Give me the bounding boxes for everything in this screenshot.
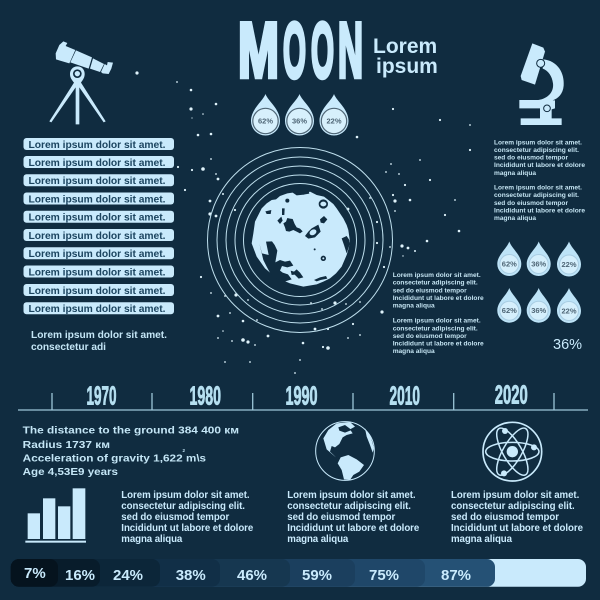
moon facts: Radius 1737 км (23, 440, 110, 451)
text block: below list: Lorem ipsum dolor sit amet. (31, 330, 167, 341)
text block: upper right: Incididunt ut labore et dolore (494, 162, 585, 169)
text block: right of moon: consectetur adipiscing elit. (393, 280, 478, 287)
title: O (311, 6, 334, 94)
text column 3: Incididunt ut labore et dolore (451, 523, 584, 534)
orbit rings (208, 148, 392, 332)
text block: right of moon: magna aliqua (393, 302, 435, 310)
moon facts (23, 425, 239, 478)
moon (252, 190, 350, 287)
text block: right of moon: Incididunt ut labore et dolore (393, 340, 484, 348)
timeline: 1970 (86, 380, 116, 410)
text column 2: magna aliqua (287, 534, 349, 545)
right percentage drops grid: 36% (531, 260, 547, 268)
list of highlighted bars: Lorem ipsum dolor sit amet. (28, 194, 166, 205)
text column 1: sed do eiusmod tempor (121, 512, 230, 523)
list of highlighted bars: Lorem ipsum dolor sit amet. (28, 213, 166, 224)
timeline: 2010 (390, 380, 420, 410)
text column 3: sed do eiusmod tempor (451, 512, 559, 523)
icon: microscope (519, 43, 564, 125)
list of highlighted bars: Lorem ipsum dolor sit amet. (28, 158, 166, 169)
icon: atom (483, 422, 542, 481)
list of highlighted bars: Lorem ipsum dolor sit amet. (28, 231, 166, 242)
text block: right of moon: magna aliqua (393, 348, 435, 355)
text block: right of moon: sed do eiusmod tempor (393, 333, 467, 340)
text block: below list: consectetur adi (31, 342, 106, 353)
moon facts: 2 (182, 448, 186, 453)
list of highlighted bars: Lorem ipsum dolor sit amet. (28, 176, 166, 187)
text column 2: sed do eiusmod tempor (287, 512, 396, 523)
progress bar: 24% (113, 567, 143, 584)
title (238, 6, 363, 94)
moon facts: m\s (186, 454, 207, 465)
text block: upper right: magna aliqua (494, 170, 536, 177)
right percentage drops grid: 22% (561, 260, 577, 269)
progress bar: 16% (65, 567, 95, 584)
text block: upper right (494, 140, 585, 222)
text block: upper right: Lorem ipsum dolor sit amet. (494, 184, 582, 192)
moon facts: Age 4,53E9 years (23, 467, 119, 478)
text column 3: magna aliqua (451, 534, 513, 545)
text: N (338, 6, 363, 94)
text column 2: Lorem ipsum dolor sit amet. (287, 490, 416, 501)
progress bar: 87% (441, 567, 471, 584)
icon: bar chart (25, 488, 86, 543)
right percentage drops grid (497, 242, 581, 323)
icon: telescope (49, 41, 113, 124)
icon: globe (316, 422, 374, 480)
text column 2: Incididunt ut labore et dolore (287, 523, 420, 534)
progress bar: 59% (302, 567, 332, 584)
moon facts: Acceleration of gravity 1,622 (23, 454, 183, 465)
text block: right of moon: Incididunt ut labore et dolore (393, 295, 484, 302)
subtitle (373, 35, 438, 78)
text block: upper right: sed do eiusmod tempor (494, 200, 568, 207)
timeline: 1980 (190, 380, 221, 410)
timeline (18, 380, 588, 410)
right percentage drops grid: 62% (502, 306, 517, 315)
right percentage drops grid: 22% (561, 306, 577, 316)
subtitle: Lorem (373, 35, 437, 58)
text column 3 (451, 490, 584, 545)
text column 2 (287, 490, 420, 545)
list of highlighted bars: Lorem ipsum dolor sit amet. (28, 140, 166, 151)
large percentage: 36% (553, 337, 582, 353)
progress bar: 75% (369, 567, 399, 584)
drop 62%: 62% (258, 116, 273, 126)
text block: upper right: magna aliqua (494, 215, 536, 222)
progress bar: 46% (237, 567, 267, 584)
title: O (283, 6, 306, 94)
list of highlighted bars: Lorem ipsum dolor sit amet. (28, 267, 166, 278)
text column 1: Incididunt ut labore et dolore (121, 523, 254, 534)
drop 36%: 36% (292, 116, 307, 126)
text column 3: consectetur adipiscing elit. (451, 501, 575, 512)
text column 1: consectetur adipiscing elit. (121, 501, 245, 512)
list of highlighted bars: Lorem ipsum dolor sit amet. (28, 286, 166, 297)
text block: upper right: Lorem ipsum dolor sit amet. (494, 140, 582, 146)
title: M (238, 6, 279, 94)
progress bar: 38% (176, 567, 206, 584)
subtitle: ipsum (376, 55, 438, 78)
star field (135, 71, 471, 374)
moon facts: The distance to the ground 384 400 км (23, 425, 239, 436)
text block: upper right: Incididunt ut labore et dolore (494, 208, 585, 214)
list of highlighted bars: Lorem ipsum dolor sit amet. (28, 304, 166, 315)
text column 3: Lorem ipsum dolor sit amet. (451, 490, 580, 501)
text column 1 (121, 490, 254, 545)
text block: right of moon: consectetur adipiscing elit. (393, 325, 478, 332)
progress bar: 7% (24, 565, 46, 582)
text block: upper right: consectetur adipiscing elit. (494, 147, 579, 154)
list of highlighted bars: Lorem ipsum dolor sit amet. (28, 249, 166, 260)
drop 22%: 22% (326, 116, 342, 126)
text column 2: consectetur adipiscing elit. (287, 501, 411, 512)
right percentage drops grid: 36% (531, 306, 547, 315)
timeline: 1990 (286, 380, 318, 410)
top percentage drops (251, 94, 348, 136)
text block: right of moon: Lorem ipsum dolor sit amet. (393, 272, 481, 279)
text block: right of moon: sed do eiusmod tempor (393, 287, 467, 294)
text block: below list (31, 330, 167, 353)
text block: right of moon (393, 272, 484, 355)
text block: right of moon: Lorem ipsum dolor sit amet. (393, 318, 481, 325)
timeline: 2020 (495, 380, 528, 410)
right percentage drops grid: 62% (502, 260, 517, 268)
text column 1: Lorem ipsum dolor sit amet. (121, 490, 250, 501)
text column 1: magna aliqua (121, 534, 183, 545)
text block: upper right: sed do eiusmod tempor (494, 154, 568, 162)
progress bar (11, 559, 586, 587)
list of highlighted bars (24, 138, 174, 315)
text block: upper right: consectetur adipiscing elit. (494, 192, 579, 199)
